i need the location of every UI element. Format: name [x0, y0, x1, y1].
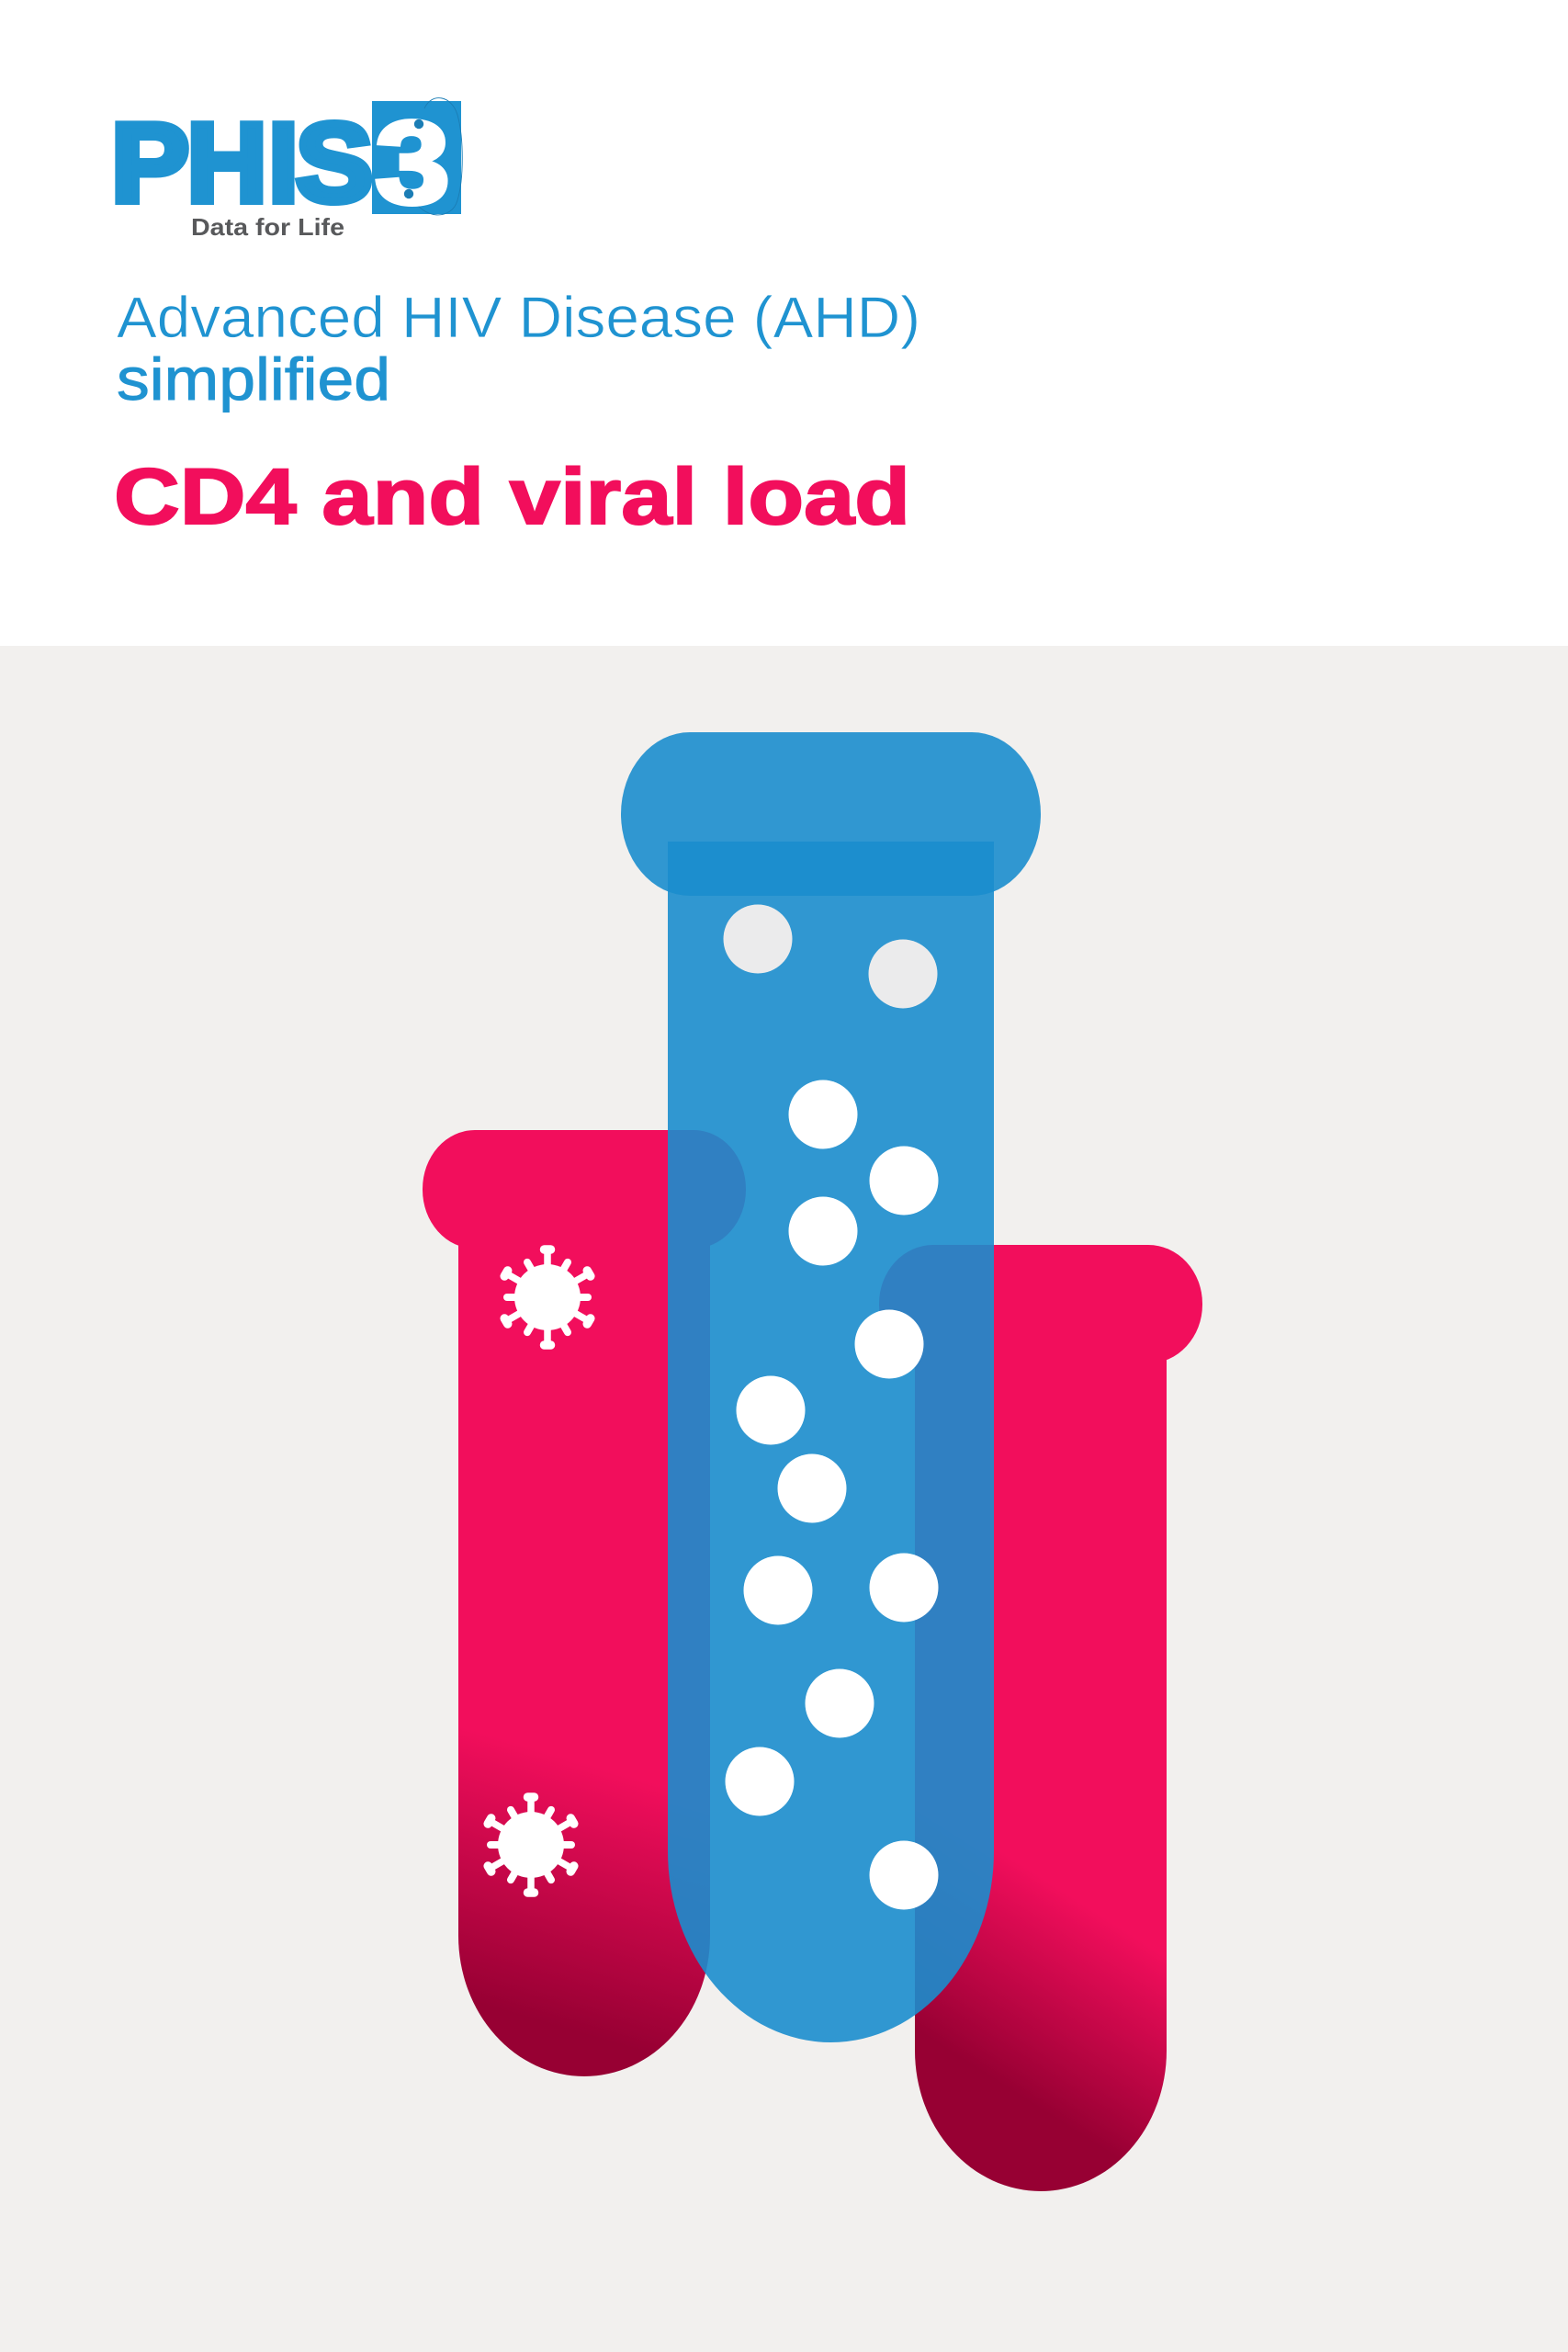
logo wordmark PHIS: P [111, 100, 189, 225]
right red test tube [879, 1245, 1202, 2191]
logo wordmark PHIS: H [187, 100, 267, 225]
logo tagline: Data for Life [191, 213, 344, 241]
logo wordmark PHIS [111, 100, 373, 225]
CD4 cells in blue tube [724, 904, 939, 1909]
grey illustration background [0, 646, 1568, 2352]
left red test tube [423, 1130, 746, 2076]
logo box with numeral 3: 3 [375, 97, 450, 229]
virus icon: upper [504, 1250, 591, 1345]
blue tube body [668, 842, 994, 2042]
title: CD4 and viral load: CD4 and viral load [114, 453, 910, 541]
logo wordmark PHIS: I [268, 100, 298, 225]
logo: PHIS3 Data for Life [111, 97, 462, 241]
white header background [0, 0, 1568, 646]
logo wordmark PHIS: S [296, 100, 373, 225]
virus icon: lower [488, 1797, 574, 1893]
heading: Advanced HIV Disease (AHD): Advanced HIV Disease (AHD) [117, 286, 920, 350]
blue test tube [621, 732, 1041, 2042]
blue tube cap [621, 732, 1041, 896]
heading: simplified: simplified [117, 345, 390, 413]
